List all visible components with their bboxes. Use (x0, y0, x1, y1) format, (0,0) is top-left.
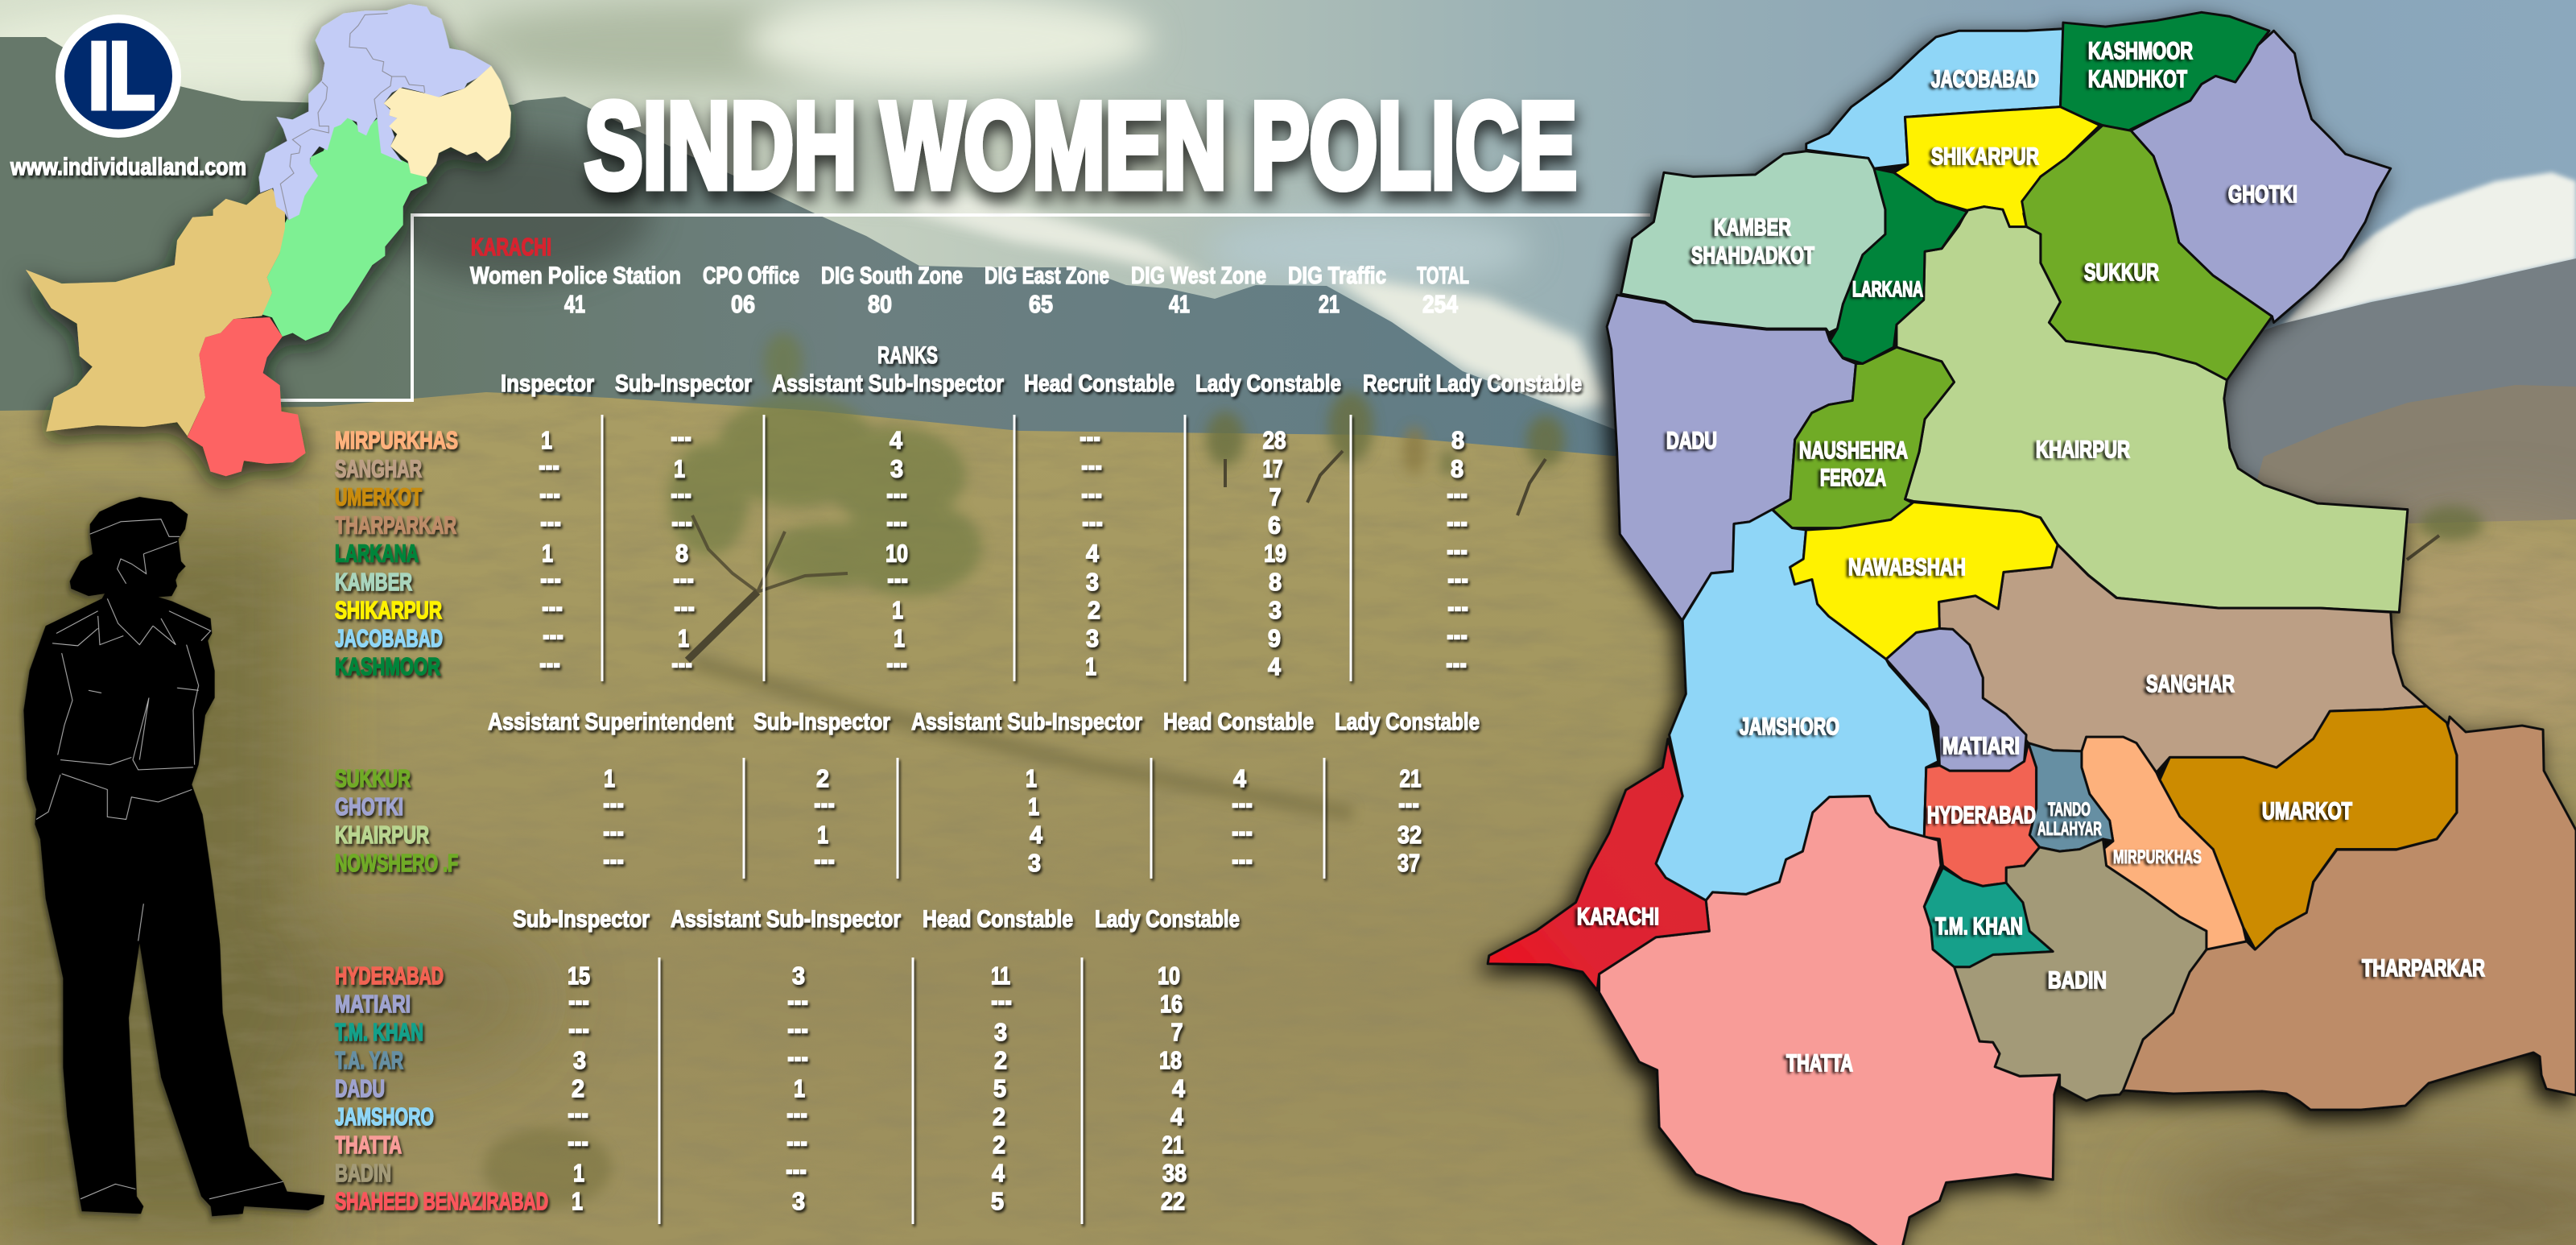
row: shaheed benazirabad: 22 (1161, 1187, 1185, 1215)
karachi values: 65 (1029, 290, 1053, 318)
row: kamber: --- (673, 562, 694, 596)
district: umarkot (2160, 706, 2457, 949)
row: t.a. yar: --- (787, 1040, 808, 1074)
row: jamshoro: --- (568, 1097, 588, 1131)
row: sanghar: 3 (890, 455, 903, 483)
row: sukkur (335, 764, 1422, 792)
row: jacobabad: --- (1447, 618, 1468, 652)
row: ghotki (335, 787, 1419, 821)
figure: policewoman silhouette (23, 497, 324, 1216)
region: punjab (262, 117, 427, 341)
rank headers: Head Constable (1163, 709, 1314, 735)
row: jacobabad: --- (543, 618, 564, 652)
row: larkana: --- (1447, 534, 1468, 568)
district: kashmoor kandhkot (2060, 12, 2269, 130)
row: badin: --- (786, 1153, 807, 1187)
map district labels: ALLAHYAR (2037, 818, 2102, 840)
row: shaheed benazirabad: SHAHEED BENAZIRABAD (335, 1187, 548, 1215)
row: jacobabad: 9 (1268, 624, 1281, 652)
row: badin: BADIN (335, 1159, 391, 1187)
connector line (270, 215, 1650, 400)
karachi values: 254 (1422, 290, 1459, 318)
karachi headers: CPO Office (703, 263, 799, 289)
map district labels: LARKANA (1852, 277, 1923, 301)
row: larkana: 4 (1086, 540, 1100, 568)
row: shaheed benazirabad (335, 1187, 1185, 1215)
row: sukkur: 21 (1399, 764, 1422, 792)
region: kashmir (384, 66, 511, 177)
row: hyderabad: 15 (568, 962, 590, 990)
row: umerkot: --- (1447, 478, 1468, 511)
row: larkana: 8 (675, 540, 688, 568)
rank headers: Sub-Inspector (753, 709, 890, 735)
row: ghotki: --- (814, 787, 835, 821)
row: kamber: KAMBER (335, 568, 412, 596)
row: sukkur: 4 (1233, 764, 1247, 792)
row: nowshero feroz: NOWSHERO .F (335, 849, 458, 877)
district: tharparkar (2123, 717, 2576, 1110)
karachi headers (470, 263, 1469, 289)
karachi values (564, 290, 1459, 318)
row: larkana: 19 (1264, 540, 1286, 568)
karachi values: 21 (1319, 290, 1340, 318)
table: first division (335, 342, 1582, 681)
district: kamber shahdadkot (1621, 151, 1885, 333)
row: kashmoor: --- (539, 647, 560, 680)
row: t.a. yar: 18 (1159, 1046, 1182, 1074)
districts: upper sindh (1607, 12, 2408, 620)
row: larkana (335, 534, 1468, 568)
row: tharparkar: 6 (1268, 511, 1281, 540)
row: khairpur: --- (1232, 815, 1253, 849)
district: sanghar (1938, 544, 2426, 772)
pakistan map (26, 4, 511, 476)
rank headers: Sub-Inspector (513, 906, 650, 933)
district: khairpur (1897, 207, 2408, 612)
map district labels: SANGHAR (2146, 671, 2235, 697)
rank headers: Assistant Sub-Inspector (671, 906, 901, 933)
row: nowshero feroz: --- (603, 843, 624, 877)
rank headers: Lady Constable (1335, 709, 1480, 735)
logo letters: IL (89, 23, 155, 128)
rank headers (501, 370, 1582, 397)
row: kashmoor: --- (886, 647, 907, 680)
row: matiari: --- (991, 984, 1012, 1018)
row: sanghar: --- (1081, 449, 1102, 483)
karachi values: 41 (564, 290, 585, 318)
row: jacobabad: JACOBABAD (335, 624, 443, 652)
row: t.a. yar: 2 (994, 1046, 1007, 1074)
map district labels: JAMSHORO (1740, 713, 1839, 740)
row: badin: 1 (573, 1159, 584, 1187)
center tree (668, 333, 982, 660)
row: shikarpur (335, 590, 1468, 624)
row: t.m. khan (335, 1012, 1183, 1046)
row: tharparkar: THARPARKAR (335, 511, 456, 540)
rank headers: Recruit Lady Constable (1363, 370, 1582, 397)
row: jamshoro: --- (786, 1097, 807, 1131)
karachi headers: DIG East Zone (985, 263, 1109, 289)
row: kashmoor: --- (1446, 647, 1467, 680)
row: mirpurkhas: --- (671, 420, 691, 454)
map district labels: SHAHDADKOT (1691, 242, 1814, 269)
district: larkana (1830, 168, 1967, 364)
row: t.a. yar: T.A. YAR (335, 1046, 403, 1074)
district: matiari (1886, 628, 2026, 771)
row: sanghar: SANGHAR (335, 455, 422, 483)
table: second division (335, 709, 1480, 879)
row: mirpurkhas: 1 (541, 426, 552, 454)
rank headers: Inspector (501, 370, 594, 397)
rank headers: Assistant Sub-Inspector (772, 370, 1004, 397)
map district labels: KARACHI (1577, 904, 1659, 930)
row: umerkot: --- (539, 478, 560, 511)
region boundaries (280, 14, 425, 220)
row: jacobabad (335, 618, 1468, 652)
row: jamshoro: JAMSHORO (335, 1102, 434, 1131)
region: balochistan, punjab, sindh (26, 117, 427, 476)
row: ghotki: 1 (1028, 792, 1039, 821)
row: sukkur: SUKKUR (335, 764, 411, 792)
row: jacobabad: 1 (894, 624, 905, 652)
map district labels: KAMBER (1714, 214, 1791, 241)
row: khairpur: --- (603, 815, 624, 849)
row: larkana: 1 (542, 540, 553, 568)
row: umerkot: 7 (1269, 483, 1282, 511)
row: sanghar: 17 (1262, 455, 1283, 483)
district: mirpurkhas (2082, 737, 2247, 949)
row: mirpurkhas: 28 (1262, 426, 1286, 454)
row: shikarpur: --- (1447, 590, 1468, 624)
region: northern areas and kashmir (259, 4, 511, 220)
row: ghotki: GHOTKI (335, 792, 403, 821)
row: nowshero feroz: --- (814, 843, 835, 877)
row: khairpur: 1 (817, 821, 828, 849)
map district labels: MIRPURKHAS (2113, 846, 2202, 868)
row: matiari: 16 (1160, 990, 1183, 1018)
row: thatta: --- (568, 1125, 588, 1159)
row: t.m. khan: 3 (994, 1018, 1007, 1046)
row: khairpur: KHAIRPUR (335, 821, 429, 849)
row: ghotki: --- (1398, 787, 1419, 821)
row: larkana: LARKANA (335, 540, 419, 568)
row: tharparkar: --- (540, 506, 561, 540)
district: karachi (1488, 739, 1709, 991)
rank headers: Assistant Superintendent (488, 709, 733, 735)
row: thatta: 21 (1162, 1131, 1183, 1159)
row: thatta: THATTA (335, 1131, 402, 1159)
row: thatta (335, 1125, 1183, 1159)
row: umerkot: --- (671, 478, 691, 511)
row: umerkot (335, 478, 1468, 511)
sindh district map (1488, 12, 2576, 1245)
region: northern areas (259, 4, 491, 220)
title: SINDH WOMEN POLICE (584, 77, 1577, 214)
row: thatta: 2 (993, 1131, 1005, 1159)
logo (56, 14, 181, 138)
map district labels: MATIARI (1942, 733, 2020, 759)
map district labels: FEROZA (1820, 465, 1886, 491)
row: sanghar: 8 (1451, 455, 1463, 483)
row: mirpurkhas: MIRPURKHAS (335, 426, 458, 454)
map district labels: DADU (1666, 428, 1717, 454)
rank headers: Head Constable (1024, 370, 1174, 397)
row: shikarpur: 1 (892, 596, 903, 624)
row: t.m. khan: --- (787, 1012, 808, 1046)
row: tharparkar: --- (671, 506, 692, 540)
map district labels: GHOTKI (2228, 181, 2297, 208)
map district labels: UMARKOT (2262, 798, 2352, 825)
row: mirpurkhas: 8 (1451, 426, 1464, 454)
rank headers (513, 906, 1240, 933)
row: larkana: 10 (886, 540, 908, 568)
row: t.m. khan: --- (568, 1012, 589, 1046)
row: shaheed benazirabad: 5 (991, 1187, 1004, 1215)
row: sanghar: 1 (674, 455, 685, 483)
row: jamshoro: 2 (993, 1102, 1005, 1131)
row: kashmoor (335, 647, 1467, 680)
district: tando allahyar (2029, 743, 2113, 851)
row: t.a. yar: 3 (573, 1046, 586, 1074)
row: t.m. khan: 7 (1170, 1018, 1183, 1046)
row: jamshoro: 4 (1170, 1102, 1184, 1131)
row: khairpur: 32 (1397, 821, 1422, 849)
row: kamber (335, 562, 1468, 596)
row: dadu (335, 1074, 1186, 1102)
rank headers: Lady Constable (1195, 370, 1341, 397)
row: khairpur (335, 815, 1422, 849)
district: nawabshah (1790, 503, 2058, 660)
karachi values: 06 (731, 290, 755, 318)
row: kamber: --- (1447, 562, 1468, 596)
district: ghotki (2131, 31, 2391, 323)
row: dadu: 4 (1172, 1074, 1186, 1102)
row: shikarpur: 3 (1269, 596, 1282, 624)
region: sindh (188, 317, 305, 476)
row: kashmoor: KASHMOOR (335, 652, 440, 680)
row: tharparkar: --- (1082, 506, 1103, 540)
row: kashmoor: 1 (1085, 652, 1096, 680)
row: nowshero feroz (335, 843, 1420, 877)
map district labels: NAWABSHAH (1848, 554, 1966, 581)
row: sukkur: 1 (1026, 764, 1037, 792)
district: naushehra feroza (1773, 347, 1955, 528)
row: sanghar (335, 449, 1463, 483)
map district labels: SHIKARPUR (1931, 143, 2039, 170)
row: ghotki: --- (1232, 787, 1253, 821)
row: umerkot: --- (886, 478, 907, 511)
ranks heading: RANKS (877, 342, 938, 369)
district: jacobabad (1806, 29, 2063, 168)
row: kamber: --- (540, 562, 561, 596)
karachi values: 80 (868, 290, 892, 318)
rank headers: Assistant Sub-Inspector (911, 709, 1142, 735)
karachi summary (470, 233, 1469, 318)
row: nowshero feroz: 3 (1028, 849, 1041, 877)
district: t.m. khan (1924, 867, 2053, 967)
row: jacobabad: 3 (1086, 624, 1099, 652)
row: dadu: 1 (794, 1074, 805, 1102)
district: thatta (1600, 796, 2060, 1245)
karachi heading: KARACHI (471, 233, 551, 261)
district: sukkur (2022, 126, 2272, 380)
row: sanghar: --- (539, 449, 559, 483)
row: hyderabad: 3 (792, 962, 805, 990)
row: matiari (335, 984, 1183, 1018)
row: hyderabad: HYDERABAD (335, 962, 444, 990)
row: shikarpur: 2 (1088, 596, 1100, 624)
map district labels: BADIN (2048, 967, 2107, 994)
region: balochistan (26, 188, 285, 436)
row: badin (335, 1153, 1187, 1187)
row: t.a. yar (335, 1040, 1182, 1074)
map district labels (1577, 38, 2485, 1077)
row: matiari: --- (787, 984, 808, 1018)
district: dadu (1607, 295, 1856, 620)
district: badin (1955, 839, 2207, 1101)
rank headers: Lady Constable (1095, 906, 1240, 933)
row: jacobabad: 1 (678, 624, 689, 652)
row: khairpur: 4 (1030, 821, 1043, 849)
karachi headers: DIG West Zone (1131, 263, 1266, 289)
district: hyderabad (1924, 743, 2040, 886)
row: shaheed benazirabad: 1 (572, 1187, 583, 1215)
karachi headers: DIG South Zone (821, 263, 963, 289)
row: badin: 4 (992, 1159, 1005, 1187)
district: jamshoro (1656, 510, 1938, 900)
karachi headers: Women Police Station (470, 263, 681, 289)
karachi headers: TOTAL (1417, 263, 1469, 289)
row: matiari: MATIARI (335, 990, 411, 1018)
row: sukkur: 1 (604, 764, 615, 792)
row: sukkur: 2 (816, 764, 829, 792)
row: shikarpur: --- (674, 590, 695, 624)
row: jamshoro (335, 1097, 1184, 1131)
row: t.m. khan: T.M. KHAN (335, 1018, 423, 1046)
map district labels: KHAIRPUR (2036, 436, 2130, 463)
karachi values: 41 (1169, 290, 1190, 318)
row: hyderabad (335, 962, 1180, 990)
row: kamber: 8 (1269, 568, 1282, 596)
row: kamber: --- (887, 562, 908, 596)
website: www.individualland.com (10, 154, 246, 180)
map district labels: KASHMOOR (2088, 38, 2193, 64)
row: hyderabad: 10 (1158, 962, 1180, 990)
map district labels: T.M. KHAN (1935, 913, 2023, 940)
row: tharparkar: --- (1447, 506, 1468, 540)
row: badin: 38 (1162, 1159, 1187, 1187)
row: matiari: --- (568, 984, 589, 1018)
row: umerkot: UMERKOT (335, 483, 422, 511)
row: mirpurkhas (335, 420, 1464, 454)
rank headers: Sub-Inspector (615, 370, 752, 397)
table: third division (335, 906, 1240, 1224)
karachi headers: DIG Traffic (1288, 263, 1386, 289)
row: kamber: 3 (1086, 568, 1099, 596)
row: tharparkar: --- (886, 506, 907, 540)
row: ghotki: --- (603, 787, 624, 821)
row: mirpurkhas: --- (1080, 420, 1100, 454)
map district labels: THARPARKAR (2362, 955, 2485, 982)
rank headers (488, 709, 1480, 735)
map district labels: HYDERABAD (1927, 802, 2036, 829)
row: thatta: --- (786, 1125, 807, 1159)
map district labels: SUKKUR (2084, 259, 2159, 286)
row: shaheed benazirabad: 3 (792, 1187, 805, 1215)
map district labels: KANDHKOT (2088, 66, 2187, 93)
row: nowshero feroz: 37 (1397, 849, 1420, 877)
map district labels: JACOBABAD (1931, 66, 2039, 93)
row: umerkot: --- (1081, 478, 1102, 511)
small trees (1206, 391, 2483, 560)
row: dadu: 5 (993, 1074, 1006, 1102)
row: nowshero feroz: --- (1232, 843, 1253, 877)
row: dadu: DADU (335, 1074, 385, 1102)
district: shikarpur (1893, 107, 2100, 227)
row: mirpurkhas: 4 (890, 426, 903, 454)
map district labels: TANDO (2048, 799, 2091, 821)
map district labels: THATTA (1786, 1050, 1853, 1077)
row: kashmoor: 4 (1268, 652, 1282, 680)
rank headers: Head Constable (923, 906, 1073, 933)
map district labels: NAUSHEHRA (1799, 437, 1908, 464)
row: kashmoor: --- (671, 647, 692, 680)
districts: lower sindh (1488, 503, 2576, 1245)
row: shikarpur: SHIKARPUR (335, 596, 442, 624)
row: hyderabad: 11 (991, 962, 1010, 990)
row: shikarpur: --- (542, 590, 563, 624)
row: dadu: 2 (572, 1074, 584, 1102)
row: tharparkar (335, 506, 1468, 540)
